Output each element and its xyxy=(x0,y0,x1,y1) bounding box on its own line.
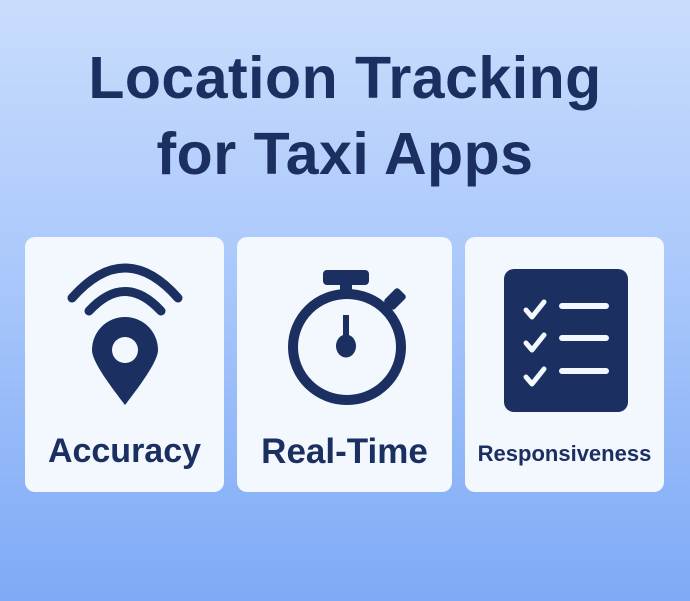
title: for Taxi Apps xyxy=(157,121,533,187)
icon: checklist xyxy=(504,269,628,412)
label: accuracy: Accuracy xyxy=(48,432,201,470)
panel: accuracy xyxy=(25,237,224,492)
panel: real-time xyxy=(237,237,452,492)
label: real-time: Real-Time xyxy=(261,432,428,471)
icon: location pin with signal xyxy=(72,268,178,405)
icon: stopwatch xyxy=(293,270,407,400)
label: responsiveness: Responsiveness xyxy=(478,441,651,466)
title: Location Tracking xyxy=(88,45,602,111)
panel: responsiveness xyxy=(465,237,664,492)
title xyxy=(88,45,602,187)
